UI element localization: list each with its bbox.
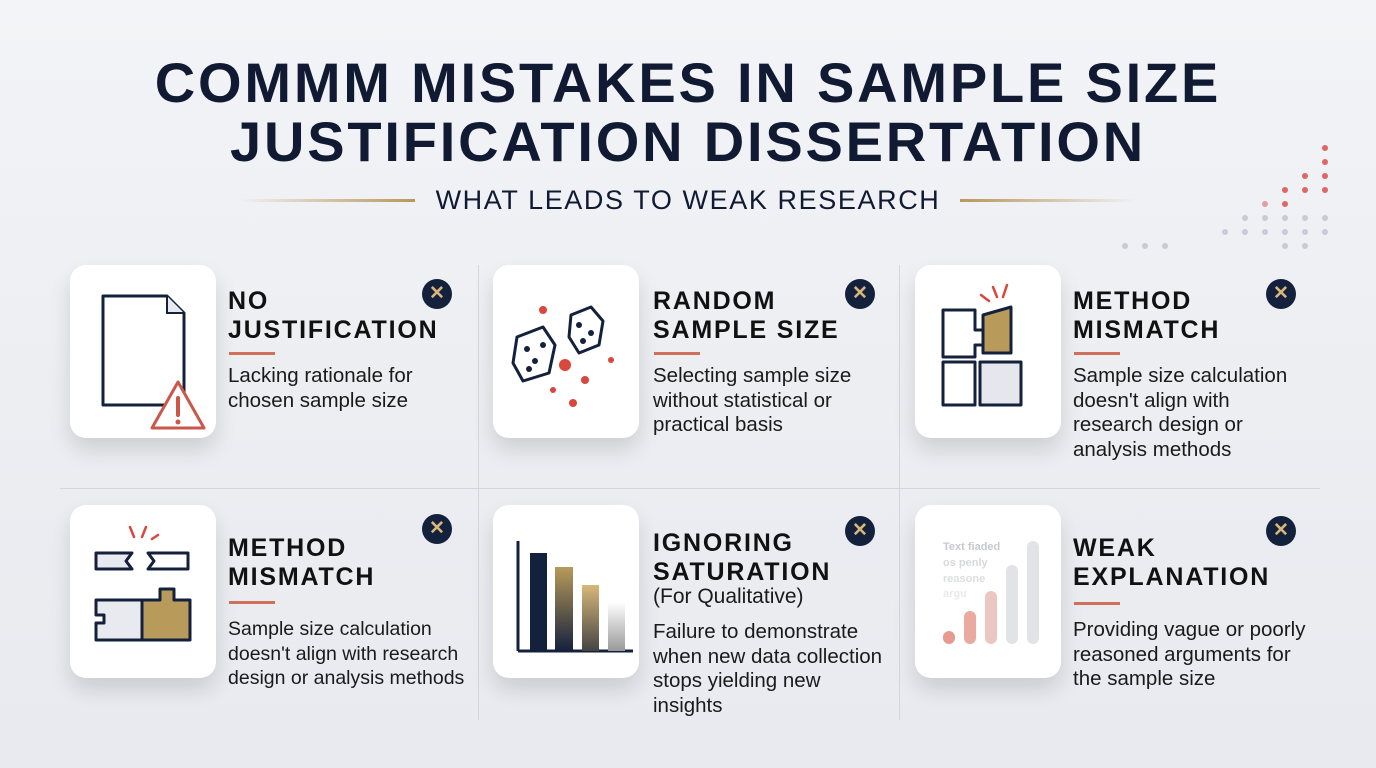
heading: WEAK [1073, 534, 1157, 562]
text [1073, 364, 1287, 460]
icon: document warning [70, 265, 216, 438]
icon: x [845, 516, 875, 546]
subtitle: WHAT LEADS TO WEAK RESEARCH [436, 185, 940, 215]
panel: ignoring saturation [486, 505, 882, 716]
heading [1073, 287, 1220, 344]
icon: broken puzzle [70, 505, 216, 678]
heading: MISMATCH [228, 563, 375, 591]
heading: JUSTIFICATION [228, 316, 438, 344]
subtitle [249, 185, 1126, 215]
heading: METHOD [1073, 287, 1192, 315]
icon: x [1266, 516, 1296, 546]
heading: EXPLANATION [1073, 563, 1270, 591]
heading: MISMATCH [1073, 316, 1220, 344]
title: COMMM MISTAKES IN SAMPLE SIZE [155, 51, 1221, 114]
text: Providing vague or poorly [1073, 618, 1305, 641]
panel: ignoring saturation: when new data collection [653, 644, 882, 668]
icon: puzzle [915, 265, 1061, 438]
heading: SATURATION [653, 558, 831, 586]
heading: IGNORING [653, 529, 794, 557]
icon: x: ✕ [852, 283, 868, 304]
panel: ignoring saturation: Failure to demonstrate [653, 620, 858, 643]
heading: SAMPLE SIZE [653, 316, 840, 344]
heading [228, 534, 375, 591]
panel: ignoring saturation: stops yielding new [653, 669, 821, 692]
panel: method mismatch 1 [908, 265, 1296, 460]
icon: faded bars: reasone [943, 573, 985, 585]
heading: RANDOM [653, 287, 776, 315]
text [228, 618, 464, 689]
text: without statistical or [653, 388, 832, 412]
panel: method mismatch 2 [64, 505, 464, 696]
heading [228, 287, 438, 344]
panel: weak explanation [908, 505, 1306, 696]
panel: no justification [64, 265, 452, 456]
icon: x: ✕ [1273, 520, 1289, 541]
icon: faded bars: os penly [943, 557, 989, 569]
icon: x: ✕ [1273, 283, 1289, 304]
text: design or analysis methods [228, 667, 464, 689]
text: doesn't align with [1073, 388, 1230, 412]
icon: x: ✕ [852, 520, 868, 541]
text: Sample size calculation [1073, 364, 1287, 387]
icon: faded bars: argu [943, 588, 967, 600]
text: the sample size [1073, 667, 1215, 690]
icon: x [422, 514, 452, 544]
text: research design or [1073, 413, 1243, 436]
text: reasoned arguments for [1073, 642, 1291, 666]
heading: METHOD [228, 534, 347, 562]
text: Lacking rationale for [228, 364, 413, 387]
text: doesn't align with research [228, 642, 458, 664]
text [1073, 618, 1306, 690]
heading [653, 529, 831, 586]
text: practical basis [653, 413, 783, 436]
heading [653, 287, 840, 344]
title [155, 51, 1221, 173]
heading [1073, 534, 1270, 591]
icon: x: ✕ [429, 283, 445, 304]
text [228, 364, 413, 412]
text: Selecting sample size [653, 364, 851, 387]
decorative dots [1122, 145, 1328, 249]
title: JUSTIFICATION DISSERTATION [230, 110, 1146, 173]
icon: dice [493, 265, 639, 438]
icon: bar chart [493, 505, 639, 678]
icon: x [845, 279, 875, 309]
text: (For Qualitative) [653, 585, 804, 608]
icon: faded bars [915, 505, 1061, 678]
text: Sample size calculation [228, 618, 432, 640]
text [653, 364, 851, 436]
icon: x [1266, 279, 1296, 309]
icon: faded bars: Text fiaded [943, 541, 1000, 553]
icon: x: ✕ [429, 518, 445, 539]
heading: NO [228, 287, 269, 315]
panel: ignoring saturation: insights [653, 694, 723, 716]
text: chosen sample size [228, 388, 408, 412]
text: analysis methods [1073, 438, 1231, 460]
panel: random sample size [486, 265, 875, 456]
icon: x [422, 279, 452, 309]
